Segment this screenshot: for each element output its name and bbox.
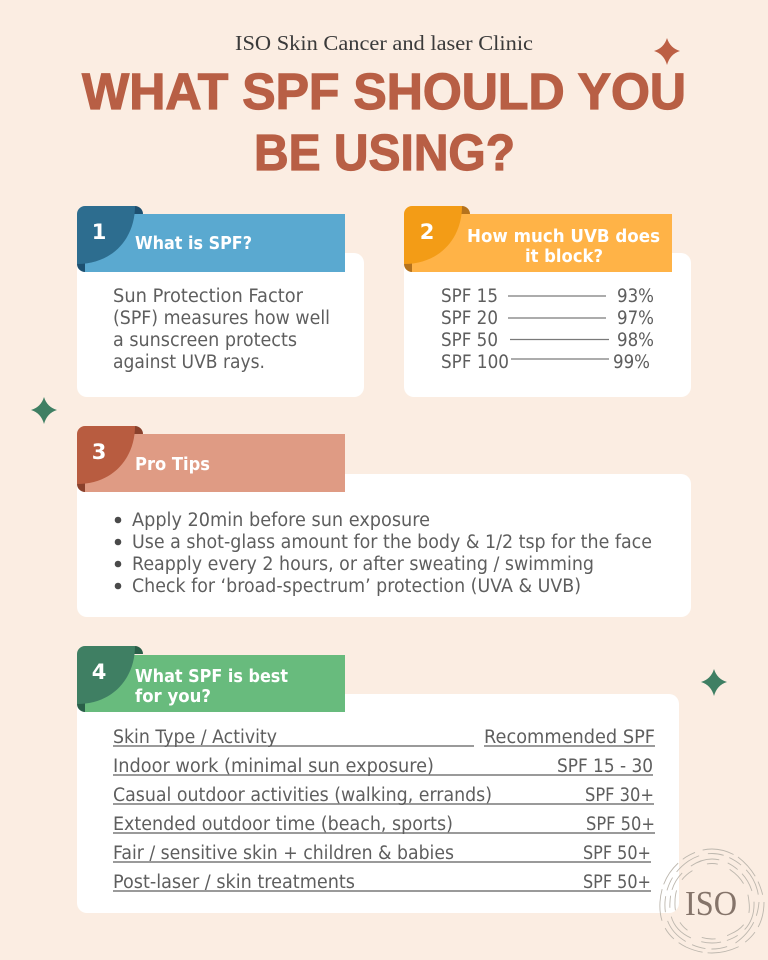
- list: UVB block rates: 98%: [617, 330, 654, 351]
- banner: how much UVB: it block?: [525, 246, 603, 267]
- table: SPF recommendations: SPF 30+: [585, 785, 654, 806]
- list: tips: [115, 510, 652, 597]
- banner: best SPF: What SPF is best: [135, 666, 288, 687]
- title: [82, 63, 686, 181]
- banner: pro tips: [77, 426, 345, 492]
- banner: how much UVB: How much UVB does: [467, 226, 660, 247]
- banner: best SPF: 4: [92, 660, 106, 684]
- text: SPF definition: against UVB rays.: [113, 352, 265, 373]
- logo: ISO ring: [660, 849, 764, 953]
- text: SPF definition: Sun Protection Factor: [113, 286, 303, 307]
- icon: green sparkle left: [31, 397, 57, 424]
- banner: pro tips: Pro Tips: [135, 454, 210, 475]
- table: SPF recommendations: Casual outdoor activities (walking, errands): [113, 785, 492, 806]
- banner: how much UVB: 2: [420, 220, 434, 244]
- table: SPF recommendations: SPF 50+: [586, 814, 655, 835]
- banner: best SPF: [77, 646, 345, 712]
- panel: how much UVB: [404, 206, 691, 397]
- list: UVB block rates: 99%: [613, 352, 650, 373]
- banner: what is SPF: 1: [92, 220, 106, 244]
- panel: what is SPF: [77, 206, 364, 397]
- table: SPF recommendations: Recommended SPF: [484, 727, 655, 748]
- table: SPF recommendations: Fair / sensitive skin + children & babies: [113, 843, 454, 864]
- banner: best SPF: for you?: [135, 686, 211, 707]
- banner: what is SPF: [77, 206, 345, 272]
- icon: green sparkle right: [701, 669, 727, 696]
- table: SPF recommendations: Post-laser / skin treatments: [113, 872, 355, 893]
- title: BE USING?: [254, 124, 515, 181]
- table: SPF recommendations: SPF 50+: [583, 843, 651, 864]
- logo: ISO ring: ISO: [685, 884, 737, 923]
- icon: orange sparkle: [654, 38, 680, 65]
- list: tips: Use a shot-glass amount for the body & 1/2 tsp for the face: [132, 532, 652, 553]
- text: SPF definition: [113, 286, 330, 373]
- table: SPF recommendations: Indoor work (minimal sun exposure): [113, 756, 434, 777]
- table: SPF recommendations: SPF 50+: [583, 872, 651, 893]
- table: SPF recommendations: Skin Type / Activity: [113, 727, 277, 748]
- list: UVB block rates: [441, 286, 654, 373]
- table: SPF recommendations: [113, 727, 655, 893]
- banner: what is SPF: What is SPF?: [135, 233, 252, 254]
- table: SPF recommendations: SPF 15 - 30: [557, 756, 653, 777]
- list: UVB block rates: 93%: [617, 286, 654, 307]
- panel: best SPF: [77, 646, 679, 913]
- list: UVB block rates: SPF 20: [441, 308, 498, 329]
- list: UVB block rates: SPF 50: [441, 330, 498, 351]
- list: tips: Apply 20min before sun exposure: [132, 510, 430, 531]
- table: SPF recommendations: Extended outdoor time (beach, sports): [113, 814, 453, 835]
- banner: pro tips: 3: [92, 440, 106, 464]
- text: SPF definition: a sunscreen protects: [113, 330, 297, 351]
- list: tips: Check for ‘broad-spectrum’ protection (UVA & UVB): [132, 576, 581, 597]
- list: tips: Reapply every 2 hours, or after sweating / swimming: [132, 554, 594, 575]
- panel: pro tips: [77, 426, 691, 617]
- list: UVB block rates: SPF 100: [441, 352, 509, 373]
- title: WHAT SPF SHOULD YOU: [82, 63, 686, 120]
- banner: how much UVB: [404, 206, 672, 272]
- subtitle: clinic name: ISO Skin Cancer and laser Clinic: [235, 31, 533, 55]
- list: UVB block rates: SPF 15: [441, 286, 498, 307]
- list: UVB block rates: 97%: [617, 308, 654, 329]
- text: SPF definition: (SPF) measures how well: [113, 308, 330, 329]
